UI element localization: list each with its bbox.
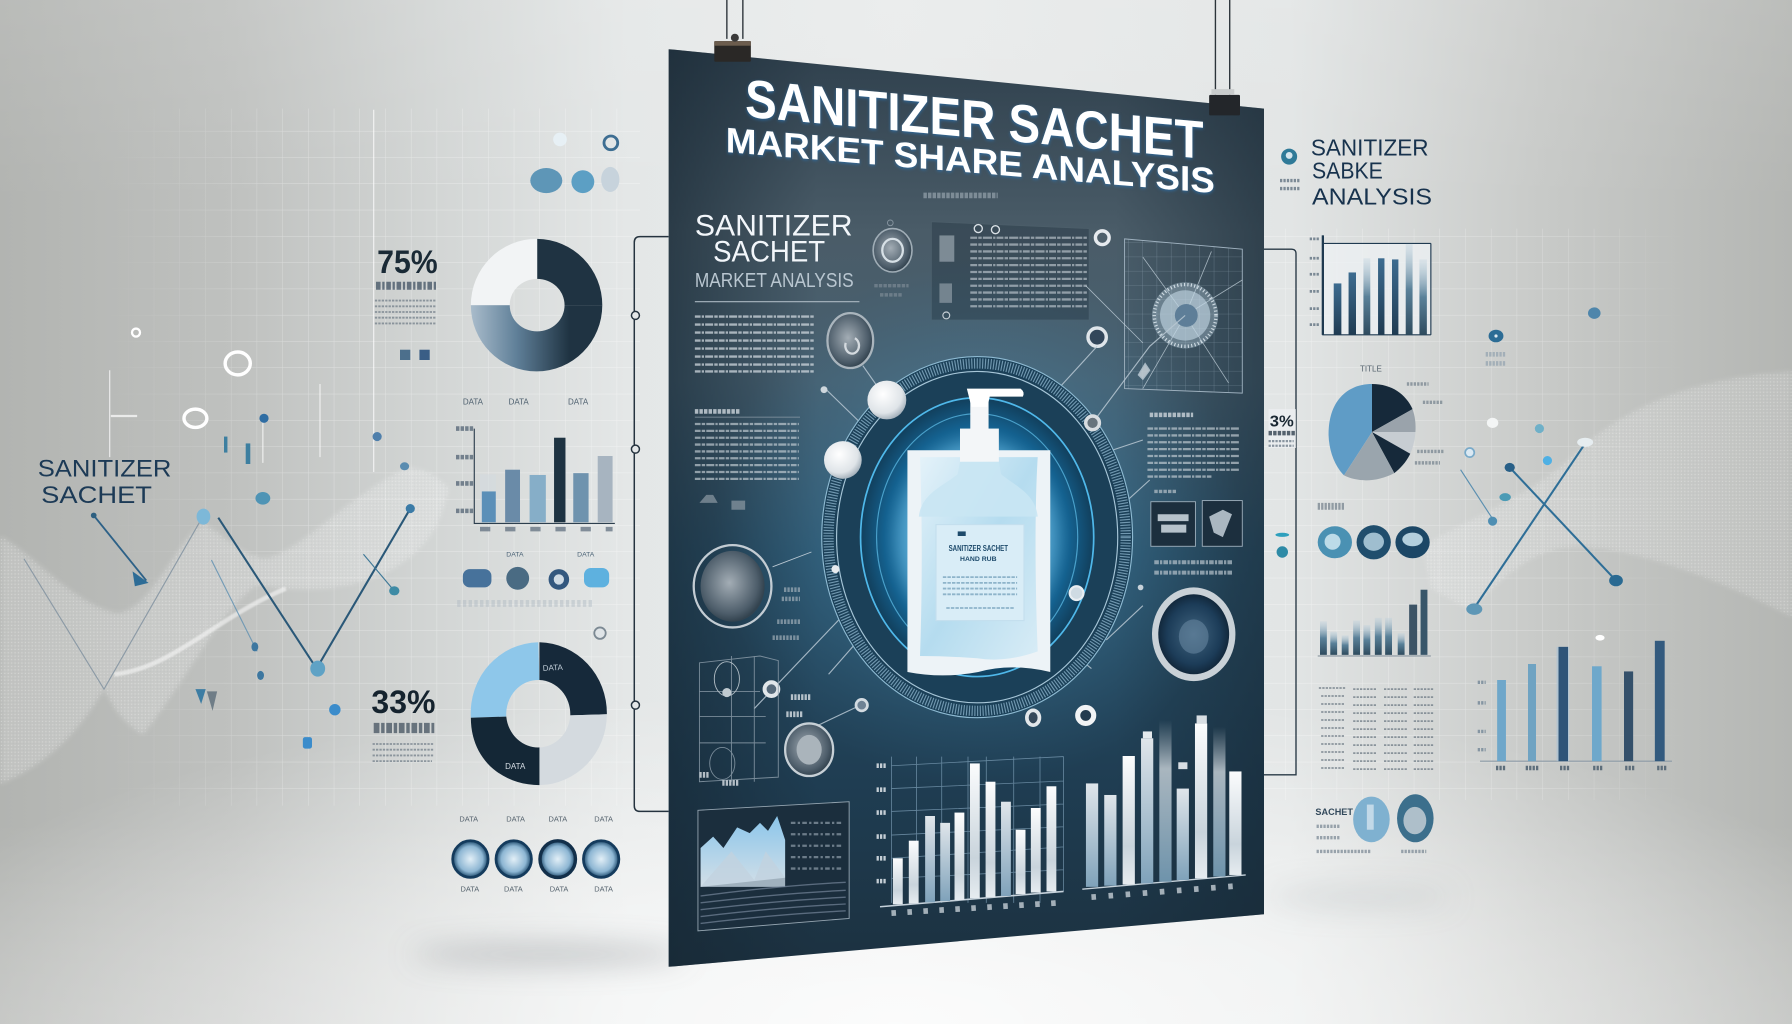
poster section heading: SACHET xyxy=(713,236,825,269)
small bars right xyxy=(1318,590,1431,656)
icon: lens two xyxy=(827,313,873,368)
bubble icon row left: DATA xyxy=(504,884,523,893)
top left icons xyxy=(530,133,619,193)
right heading: ANALYSIS xyxy=(1312,184,1432,210)
bottom right bubbles: SACHET xyxy=(1315,807,1353,817)
sachet product xyxy=(907,389,1050,675)
bubble icon row left: DATA xyxy=(459,815,478,824)
right heading xyxy=(1280,134,1432,210)
left network line chart xyxy=(24,110,415,749)
bubble icon row left: DATA xyxy=(594,815,613,824)
lens lower xyxy=(785,723,833,776)
icon: ring top right xyxy=(1095,231,1109,245)
poster xyxy=(669,49,1264,967)
right heading: SANITIZER xyxy=(1311,134,1429,160)
background grid right xyxy=(1264,228,1636,800)
pie chart right xyxy=(1329,364,1445,480)
chart labels xyxy=(463,398,589,407)
connector lines xyxy=(754,315,1185,726)
donut chart 2: DATA xyxy=(542,663,564,673)
bubble icon row left: DATA xyxy=(550,884,568,893)
bubble icon row left: DATA xyxy=(594,884,613,893)
bar chart top right xyxy=(1310,235,1431,335)
balls xyxy=(824,381,906,479)
network right xyxy=(1275,307,1623,615)
stat 33%: 33% xyxy=(371,684,435,720)
stat 33% xyxy=(371,684,435,761)
bubble icon row left xyxy=(453,815,619,893)
chart labels: DATA xyxy=(509,398,529,407)
icon: ring node xyxy=(1088,328,1106,346)
left heading: sanitizer sachet xyxy=(38,456,171,509)
lens left xyxy=(694,545,811,638)
upper panel with text xyxy=(931,222,1089,320)
central ring and glow xyxy=(822,357,1133,718)
text block right middle xyxy=(1147,415,1240,491)
bar chart two xyxy=(1082,715,1246,897)
bubble icon row left: DATA xyxy=(506,815,525,824)
poster section heading xyxy=(695,209,859,302)
mesh wave right xyxy=(1423,371,1792,617)
small ring icon xyxy=(594,627,606,639)
sub caption xyxy=(923,193,998,198)
left heading: sanitizer sachet: SACHET xyxy=(41,482,152,509)
poster section heading: SANITIZER xyxy=(695,209,853,242)
bubble icon row left: DATA xyxy=(461,884,479,893)
bar chart left xyxy=(456,429,615,529)
hanging wires and clips xyxy=(714,0,1240,115)
bar chart one xyxy=(877,757,1064,913)
sachet product: SANITIZER SACHET xyxy=(949,543,1009,553)
bracket connector left xyxy=(631,237,669,811)
donut chart 1 xyxy=(471,239,602,371)
diagram grid left xyxy=(699,656,811,783)
poster title: SANITIZER SACHET xyxy=(745,69,1204,171)
stat 33% right xyxy=(1269,409,1296,448)
bar chart right xyxy=(1478,635,1672,768)
dial right xyxy=(1152,587,1235,681)
sachet product: HAND RUB xyxy=(960,556,997,563)
donut chart 2: DATA xyxy=(505,762,526,771)
chart labels: DATA xyxy=(463,398,484,407)
background grid left xyxy=(165,108,640,806)
donut chart 2 xyxy=(471,642,607,785)
left heading: sanitizer sachet: SANITIZER xyxy=(38,456,171,483)
area chart panel xyxy=(698,802,849,931)
stat 33% right: 3% xyxy=(1270,413,1294,430)
bubble icon row left: DATA xyxy=(549,815,567,824)
text block upper left xyxy=(695,317,814,371)
picture boxes right xyxy=(1151,501,1242,573)
pie chart right: TITLE xyxy=(1360,364,1382,373)
icon row left xyxy=(457,552,609,603)
floor shadow xyxy=(411,887,1451,965)
icon row left: DATA xyxy=(506,552,524,559)
panel: germ burst on grid xyxy=(1086,239,1242,393)
icon: lens top xyxy=(873,220,912,295)
ring nodes around center xyxy=(765,416,1143,725)
right heading: SABKE xyxy=(1312,157,1383,183)
stat 75%: 75% xyxy=(377,244,438,280)
text block left middle xyxy=(695,411,800,510)
poster title: MARKET SHARE ANALYSIS xyxy=(726,120,1215,201)
bottom right bubbles xyxy=(1315,794,1434,851)
icon row left: DATA xyxy=(577,552,595,559)
chart labels: DATA xyxy=(568,398,589,407)
poster section heading: MARKET ANALYSIS xyxy=(695,269,854,292)
data table right xyxy=(1319,688,1433,769)
mesh wave left xyxy=(0,467,449,784)
bracket connector right xyxy=(1264,249,1296,775)
stat 75% xyxy=(375,244,438,360)
icon row right xyxy=(1318,506,1430,559)
